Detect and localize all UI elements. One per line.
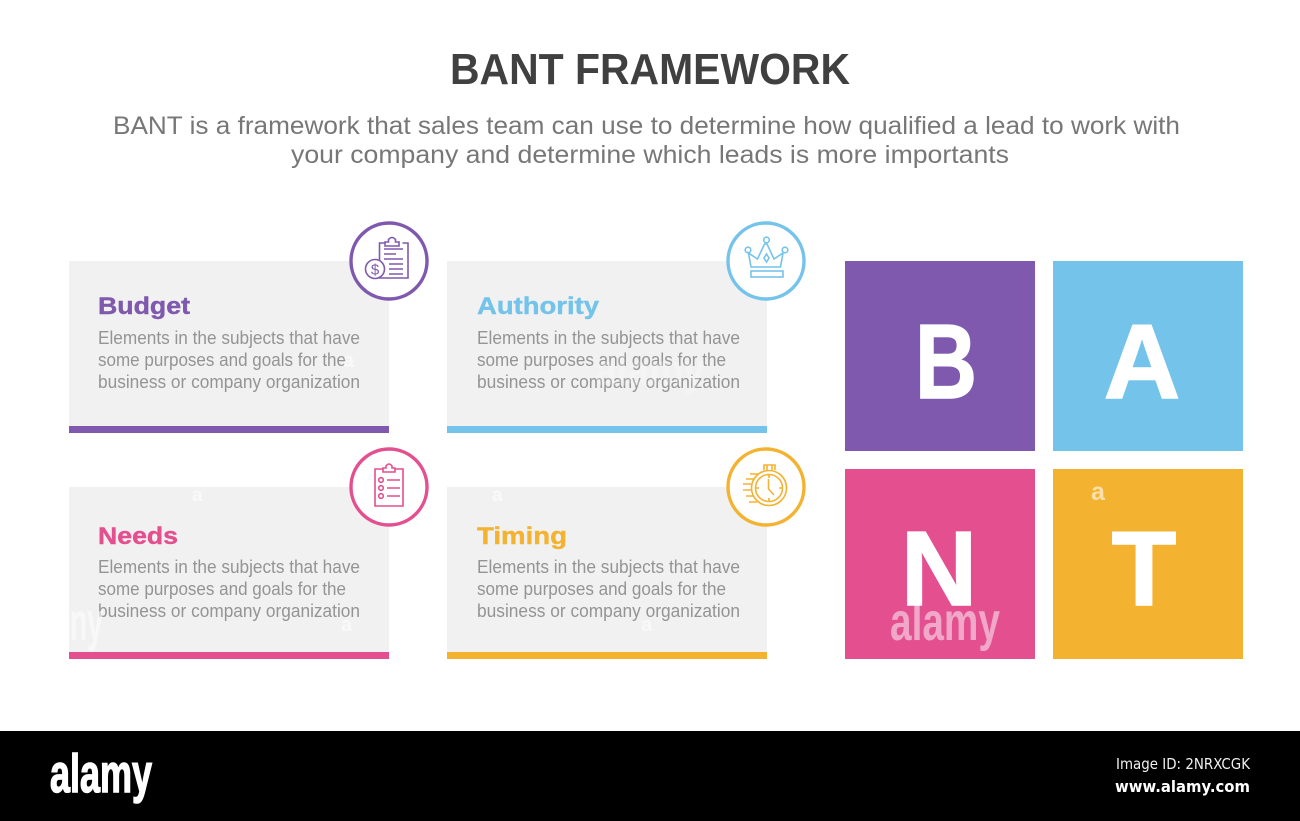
text: needs description: Elements in the subjects that have (98, 557, 360, 577)
watermark: faint alamy marks: a (492, 485, 503, 506)
watermark: faint alamy marks: a (343, 350, 355, 372)
heading: needs: Needs (98, 523, 178, 550)
subtitle: your company and determine which leads is more importants (291, 141, 1009, 169)
subtitle: BANT is a framework that sales team can use to determine how qualified a lead to work with (113, 112, 1180, 140)
watermark: faint alamy marks: a (1091, 478, 1106, 506)
panel: B square (845, 261, 1035, 451)
title: BANT FRAMEWORK (450, 45, 850, 94)
text: authority description: some purposes and goals for the (477, 350, 726, 370)
text: authority description (477, 328, 740, 392)
panel: needs card (69, 487, 389, 659)
text: budget description: some purposes and goals for the (98, 350, 346, 370)
icon: timing stopwatch (728, 449, 804, 525)
subtitle (113, 112, 1180, 169)
watermark: faint alamy marks: ny (70, 592, 103, 652)
text: authority description: business or company organization (477, 372, 740, 392)
text: needs description: some purposes and goals for the (98, 579, 346, 599)
text: needs description (98, 557, 360, 621)
text: budget description: Elements in the subjects that have (98, 328, 360, 348)
panel: B square: B (915, 303, 977, 421)
icon: authority crown (728, 223, 804, 299)
text: timing description (477, 557, 740, 621)
panel: N square (845, 469, 1035, 659)
text: timing description: some purposes and goals for the (477, 579, 726, 599)
panel: N square: N (901, 510, 977, 628)
text: budget description: business or company organization (98, 372, 360, 392)
watermark: faint alamy marks: a (341, 614, 353, 636)
icon: budget clipboard with coin: $ (371, 262, 380, 278)
text: timing description: Elements in the subjects that have (477, 557, 740, 577)
text: authority description: Elements in the subjects that have (477, 328, 740, 348)
watermark: faint alamy marks: a (641, 614, 653, 636)
icon: needs checklist (351, 449, 427, 525)
footer url: www.alamy.com (1115, 777, 1250, 796)
footer bar (0, 731, 1300, 821)
footer image id: Image ID: 2NRXCGK (1116, 755, 1251, 773)
panel: T square (1053, 469, 1243, 659)
heading: timing: Timing (477, 523, 567, 550)
panel: budget card (69, 261, 389, 433)
text: budget description (98, 328, 360, 392)
watermark: faint alamy marks: alamy (890, 592, 1000, 652)
text: needs description: business or company organization (98, 601, 360, 621)
panel: authority card (447, 261, 767, 433)
footer logo: alamy (50, 744, 152, 804)
text: timing description: business or company organization (477, 601, 740, 621)
heading: budget: Budget (98, 293, 190, 320)
panel: A square (1053, 261, 1243, 451)
watermark: faint alamy marks (70, 346, 1106, 652)
watermark: faint alamy marks: alamy (595, 346, 705, 395)
icon: budget clipboard with coin (351, 223, 427, 299)
panel: A square: A (1104, 303, 1180, 421)
heading: authority: Authority (477, 293, 600, 320)
panel: T square: T (1112, 510, 1176, 628)
panel: timing card (447, 487, 767, 659)
watermark: faint alamy marks: a (192, 485, 203, 506)
